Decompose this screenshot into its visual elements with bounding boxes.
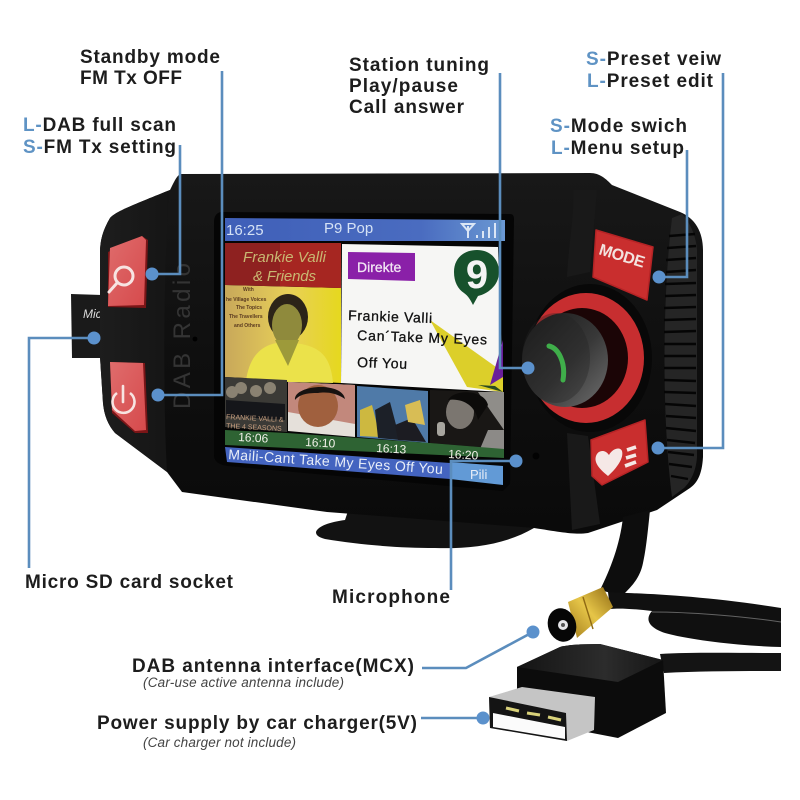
- callout: power supply: Power supply by car charger(5V): [97, 713, 417, 734]
- thumbnail 4: [430, 390, 504, 449]
- button: power: [110, 362, 148, 433]
- callout: standby mode: FM Tx OFF: [80, 68, 182, 89]
- callout: micro SD: Micro SD card socket: [25, 572, 234, 593]
- callout: power supply: (Car charger not include): [143, 735, 296, 750]
- icon: heart: [596, 448, 622, 476]
- now playing panel: [341, 244, 503, 392]
- now playing panel: Can´Take My Eyes: [357, 327, 487, 348]
- icon: magnifier: [109, 267, 133, 292]
- now playing panel: Frankie Valli: [348, 307, 432, 326]
- screen bezel: [214, 212, 514, 491]
- callout: station tuning: [349, 55, 534, 374]
- main album cover: he Village Voices: [226, 297, 267, 303]
- printed brand: DAB Radio: DAB Radio: [169, 263, 196, 409]
- knob assembly: [522, 284, 652, 432]
- callout: microphone: Microphone: [332, 587, 450, 608]
- callout: microphone: [332, 454, 522, 608]
- callout: preset: [586, 49, 723, 454]
- main album cover: and Others: [234, 323, 261, 329]
- knob surround: [528, 284, 652, 432]
- callout: DAB full scan / FM Tx setting: [23, 115, 180, 280]
- track ticker: Maili-Cant Take My Eyes Off You: [228, 446, 443, 477]
- knob: [522, 313, 608, 407]
- callout: standby mode: [80, 47, 222, 402]
- icon: signal: [462, 223, 495, 238]
- callout: mode: [550, 116, 687, 284]
- main album cover: With: [243, 287, 254, 293]
- logo: 9 speech bubble: 9: [466, 253, 488, 297]
- MCX connector: [543, 587, 613, 645]
- ring recess: [536, 308, 628, 408]
- button: mode: [593, 230, 653, 300]
- main album cover: The Topics: [236, 305, 262, 311]
- time strip: 16:13: [376, 441, 407, 457]
- icon: list bars: [625, 447, 636, 466]
- thumbnail 1: [225, 377, 287, 433]
- button: mode: MODE: [597, 242, 647, 272]
- main album cover: & Friends: [253, 268, 316, 285]
- main album cover: Frankie Valli: [243, 249, 327, 266]
- time strip: 16:20: [448, 447, 479, 463]
- button: preset heart: [591, 420, 648, 485]
- callout: DAB antenna: [132, 626, 540, 690]
- USB plug: [489, 644, 666, 741]
- right ridged grip: [664, 214, 697, 497]
- thumbnail 3: [357, 386, 428, 443]
- antenna cable coil: [608, 592, 781, 647]
- micro SD card: Mic: [83, 307, 102, 321]
- status bar: 16:25: [226, 222, 264, 239]
- callout: standby mode: Standby mode: [80, 47, 220, 68]
- callout: mode: S-Mode swich: [550, 116, 687, 137]
- radio body: [100, 173, 703, 534]
- cable from unit: [600, 510, 650, 596]
- body shading near buttons: [567, 190, 600, 530]
- red ring: [528, 293, 644, 423]
- cables and connectors: [489, 510, 781, 741]
- brand dot: [193, 337, 197, 341]
- tag: Direkte: Direkte: [357, 259, 402, 275]
- thumbnails: [225, 377, 504, 449]
- callout: station tuning: Station tuning: [349, 55, 489, 76]
- callout: DAB full scan / FM Tx setting: S-FM Tx setting: [23, 137, 176, 158]
- microphone hole: [532, 452, 540, 460]
- callout: DAB full scan / FM Tx setting: L-DAB full scan: [23, 115, 176, 136]
- callout: mode: L-Menu setup: [551, 138, 684, 159]
- thumbnail 1: THE 4 SEASONS: [226, 423, 282, 433]
- screen: [225, 218, 505, 485]
- time strip: 16:06: [238, 430, 269, 446]
- logo: 9 speech bubble: [454, 250, 499, 305]
- tag: Direkte: [348, 252, 415, 281]
- now playing panel: Off You: [357, 354, 407, 372]
- track ticker: Pili: [470, 467, 487, 482]
- thumbnail 2: [288, 382, 355, 437]
- main album cover: The Travellers: [229, 314, 263, 320]
- callout: station tuning: Play/pause: [349, 76, 458, 97]
- micro SD card: [71, 294, 102, 358]
- status bar: P9 Pop: [324, 220, 373, 237]
- icon: phone: [549, 346, 564, 380]
- time strip: [225, 430, 504, 463]
- device: DAB radio unit: [71, 173, 703, 548]
- callout: power supply: [97, 712, 490, 750]
- USB cable: [660, 653, 781, 673]
- button: search: [108, 236, 148, 308]
- callout: DAB antenna: (Car-use active antenna include): [143, 675, 344, 690]
- main album cover: [225, 243, 341, 383]
- thumbnail 1: FRANKIE VALLI &: [226, 414, 284, 424]
- album portrait: [246, 294, 333, 383]
- callout: station tuning: Call answer: [349, 97, 465, 118]
- USB metal shell: [489, 687, 595, 741]
- callout: micro SD: [25, 332, 234, 593]
- callout: preset: S-Preset veiw: [586, 49, 721, 70]
- stand foot: [316, 505, 534, 548]
- status bar: [225, 218, 505, 241]
- callout: DAB antenna: DAB antenna interface(MCX): [132, 656, 414, 677]
- time strip: 16:10: [305, 435, 336, 451]
- left body band: [100, 190, 170, 472]
- icon: power: [112, 386, 134, 413]
- track ticker: [225, 446, 503, 485]
- callout: preset: L-Preset edit: [587, 71, 714, 92]
